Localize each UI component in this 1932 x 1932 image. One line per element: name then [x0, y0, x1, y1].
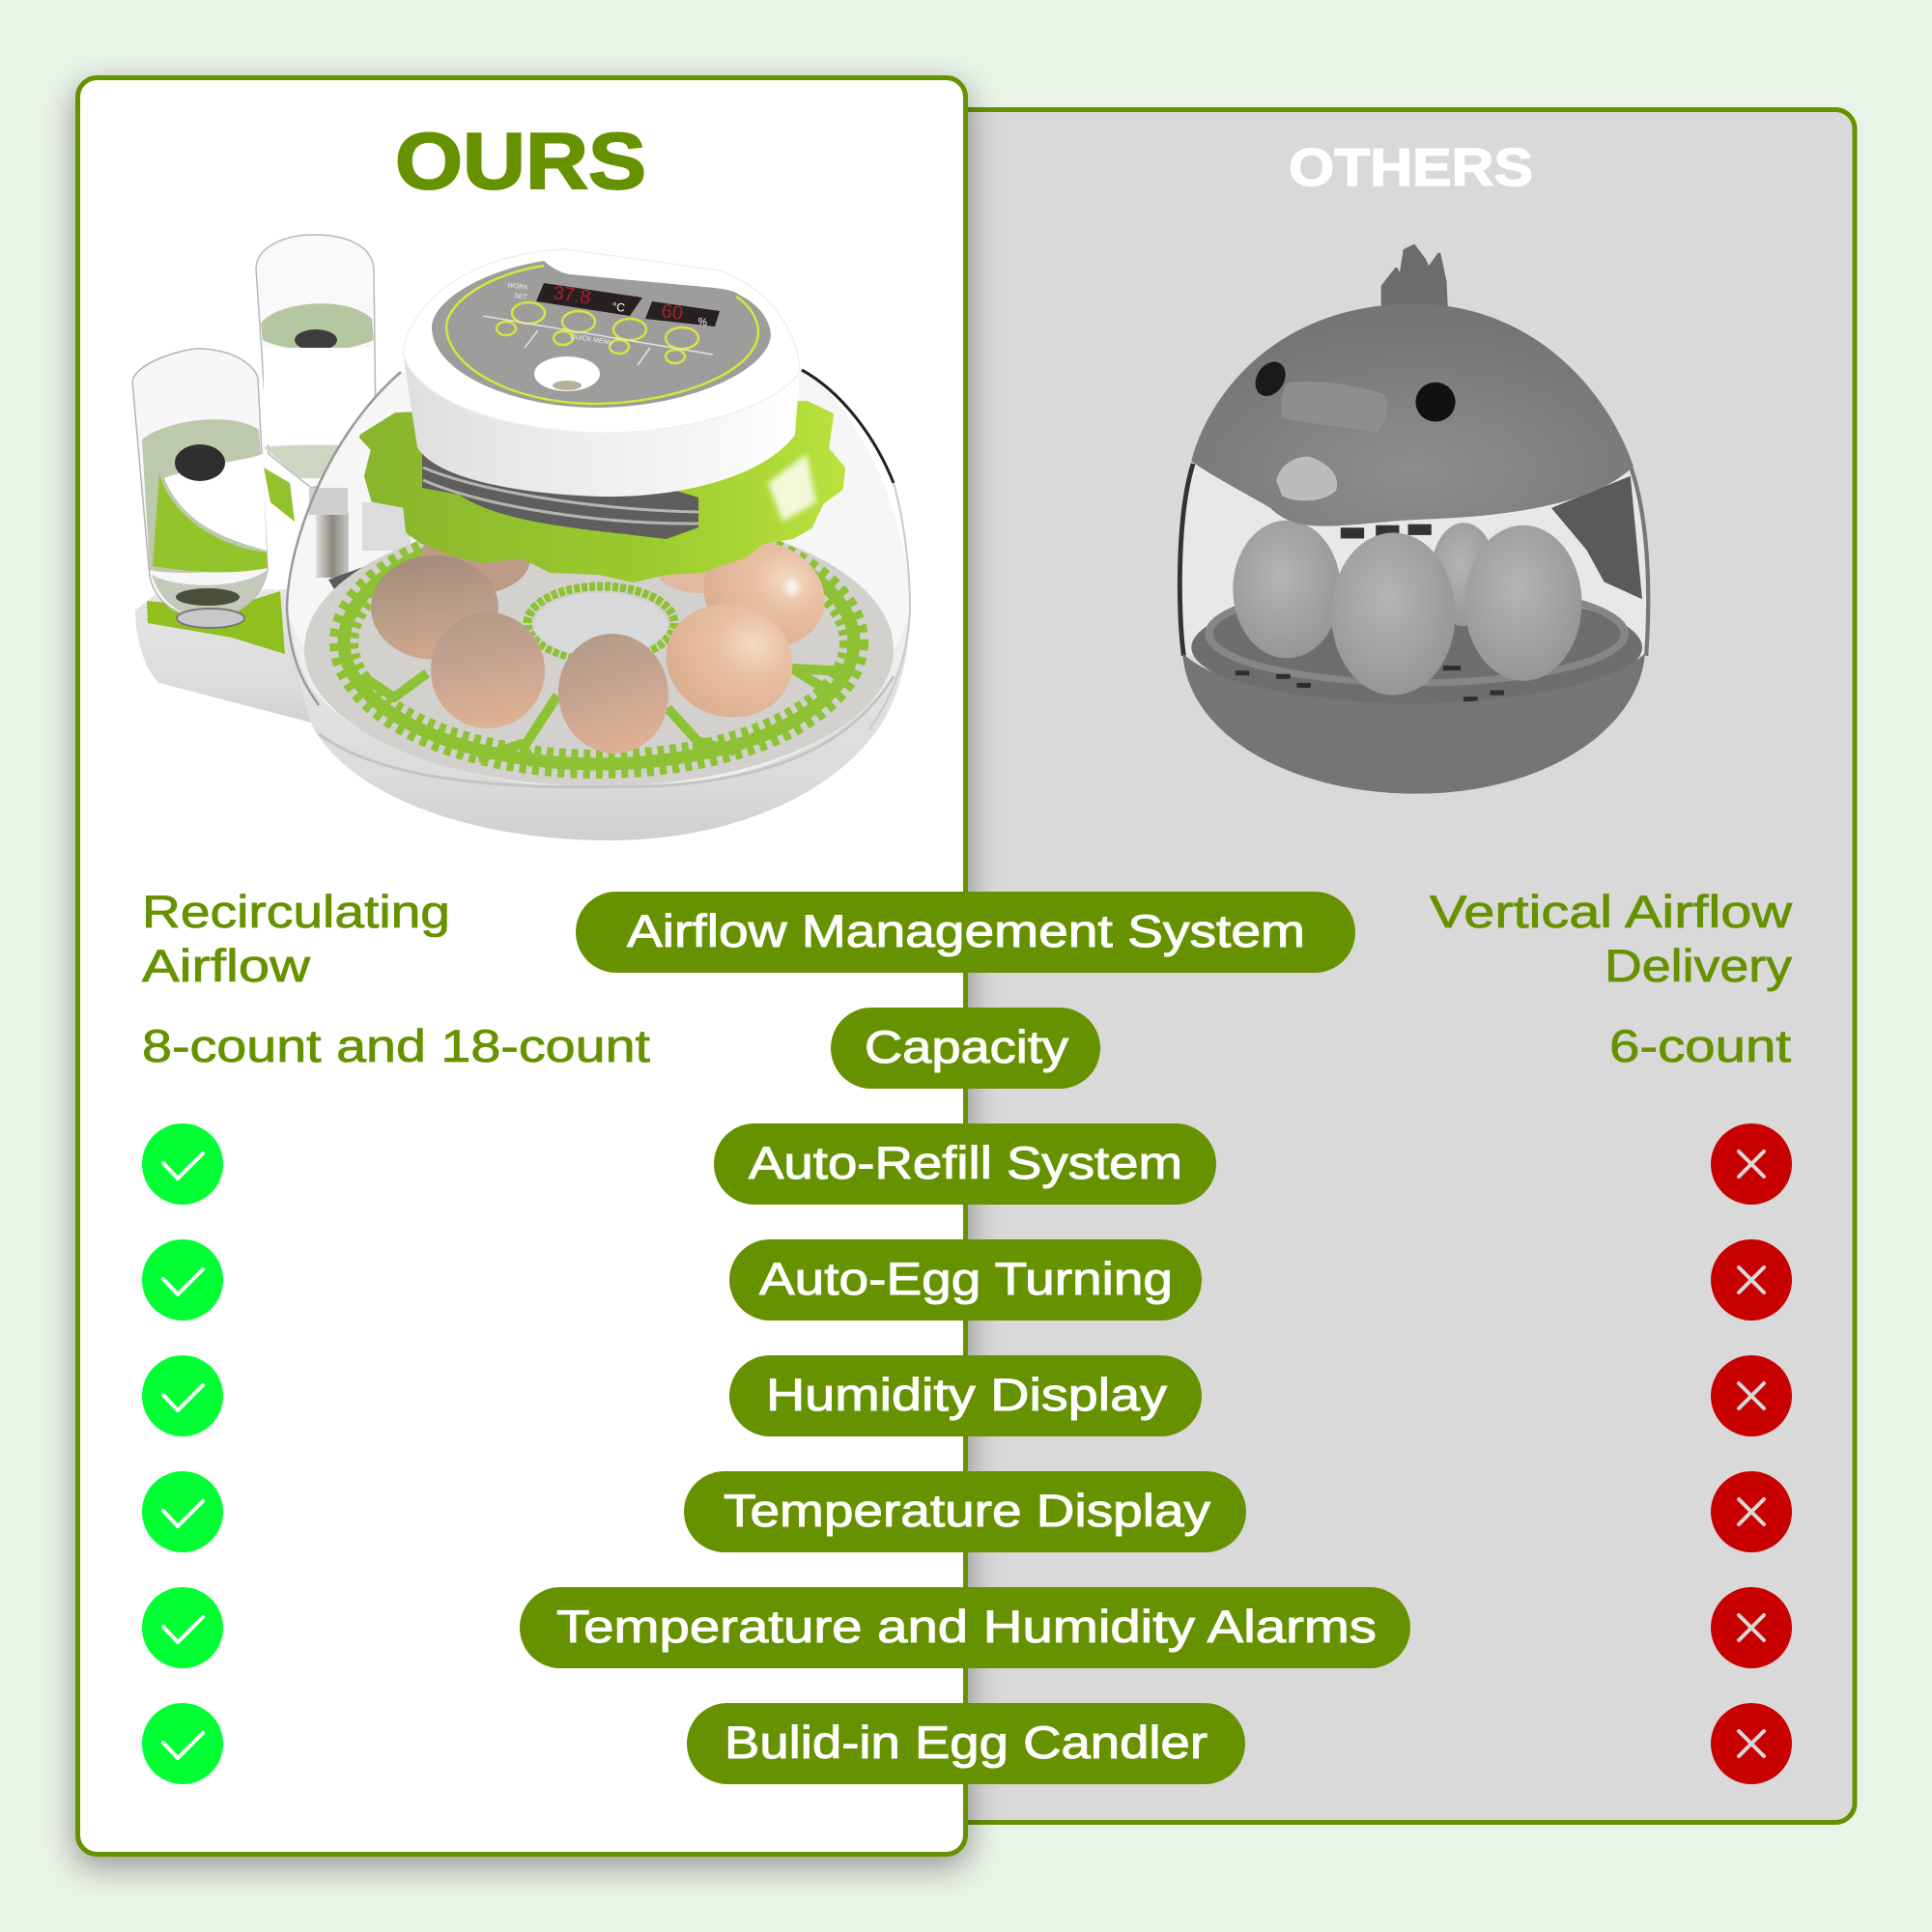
pill: temperature and humidity alarms [520, 1587, 1410, 1668]
rear bottle [256, 235, 376, 522]
icon: cross alarms [1711, 1587, 1792, 1668]
control panel: SET [514, 293, 528, 301]
control panel: WORK [507, 282, 529, 292]
icon: check egg candler [142, 1703, 223, 1784]
pill: airflow management system: Airflow Management System [627, 905, 1305, 956]
fan stack [422, 446, 698, 539]
values: ours airflow [142, 886, 450, 991]
control panel: °C [611, 299, 626, 315]
control panel: % [697, 316, 708, 328]
pill: auto-egg turning: Auto-Egg Turning [759, 1253, 1173, 1304]
pill: built-in egg candler [687, 1703, 1245, 1784]
icon: check auto-egg turning [142, 1239, 223, 1321]
front bottle [132, 349, 268, 628]
pill: humidity display [729, 1355, 1202, 1436]
icon: ours incubator photo [132, 235, 910, 840]
dome glass back [287, 370, 910, 778]
pill: auto-refill system: Auto-Refill System [749, 1137, 1182, 1188]
green flap [362, 404, 842, 580]
icon: check alarms [142, 1587, 223, 1668]
control panel: QUICK MENU [570, 333, 613, 347]
values: others airflow: Delivery [1605, 940, 1793, 991]
gear ring [344, 521, 854, 764]
heading: others: OTHERS [1289, 137, 1533, 197]
pill: temperature display [684, 1471, 1246, 1552]
dome base [288, 609, 910, 840]
lid [403, 249, 800, 497]
tray [135, 589, 319, 724]
mechanism [309, 488, 411, 604]
icon: check humidity display [142, 1355, 223, 1436]
icon: cross humidity display [1711, 1355, 1792, 1436]
values: ours airflow: Recirculating [142, 886, 450, 937]
value: others capacity: 6-count [1609, 1020, 1791, 1071]
dome glass lines [287, 372, 401, 705]
values: others airflow [1430, 886, 1793, 991]
value: ours capacity: 8-count and 18-count [142, 1020, 650, 1071]
pill: temperature and humidity alarms: Temperature and Humidity Alarms [556, 1601, 1377, 1652]
icon: cross egg candler [1711, 1703, 1792, 1784]
pill: auto-egg turning [729, 1239, 1202, 1321]
shadow of ours panel [75, 87, 968, 1866]
pill: airflow management system [576, 892, 1355, 973]
pill: built-in egg candler: Bulid-in Egg Candler [724, 1717, 1208, 1768]
floor [304, 512, 894, 786]
control panel: 37.8 [552, 282, 592, 308]
icon: cross auto-egg turning [1711, 1239, 1792, 1321]
icon: cross temperature display [1711, 1471, 1792, 1552]
pill: capacity: Capacity [865, 1021, 1069, 1072]
pill: auto-refill system [714, 1123, 1216, 1205]
values: others airflow: Vertical Airflow [1430, 886, 1793, 937]
control panel: 60 [660, 300, 684, 325]
pill: humidity display: Humidity Display [766, 1369, 1168, 1420]
spokes [362, 668, 845, 765]
heading: ours: OURS [395, 116, 646, 206]
pill: capacity [831, 1008, 1100, 1089]
icon: check auto-refill [142, 1123, 223, 1205]
icon: others chick-shaped incubator photo [1179, 246, 1648, 794]
values: ours airflow: Airflow [142, 940, 311, 991]
control panel [432, 261, 771, 408]
icon: cross auto-refill [1711, 1123, 1792, 1205]
eggs [371, 523, 839, 760]
pill: temperature display: Temperature Display [724, 1485, 1211, 1536]
icon: check temperature display [142, 1471, 223, 1552]
